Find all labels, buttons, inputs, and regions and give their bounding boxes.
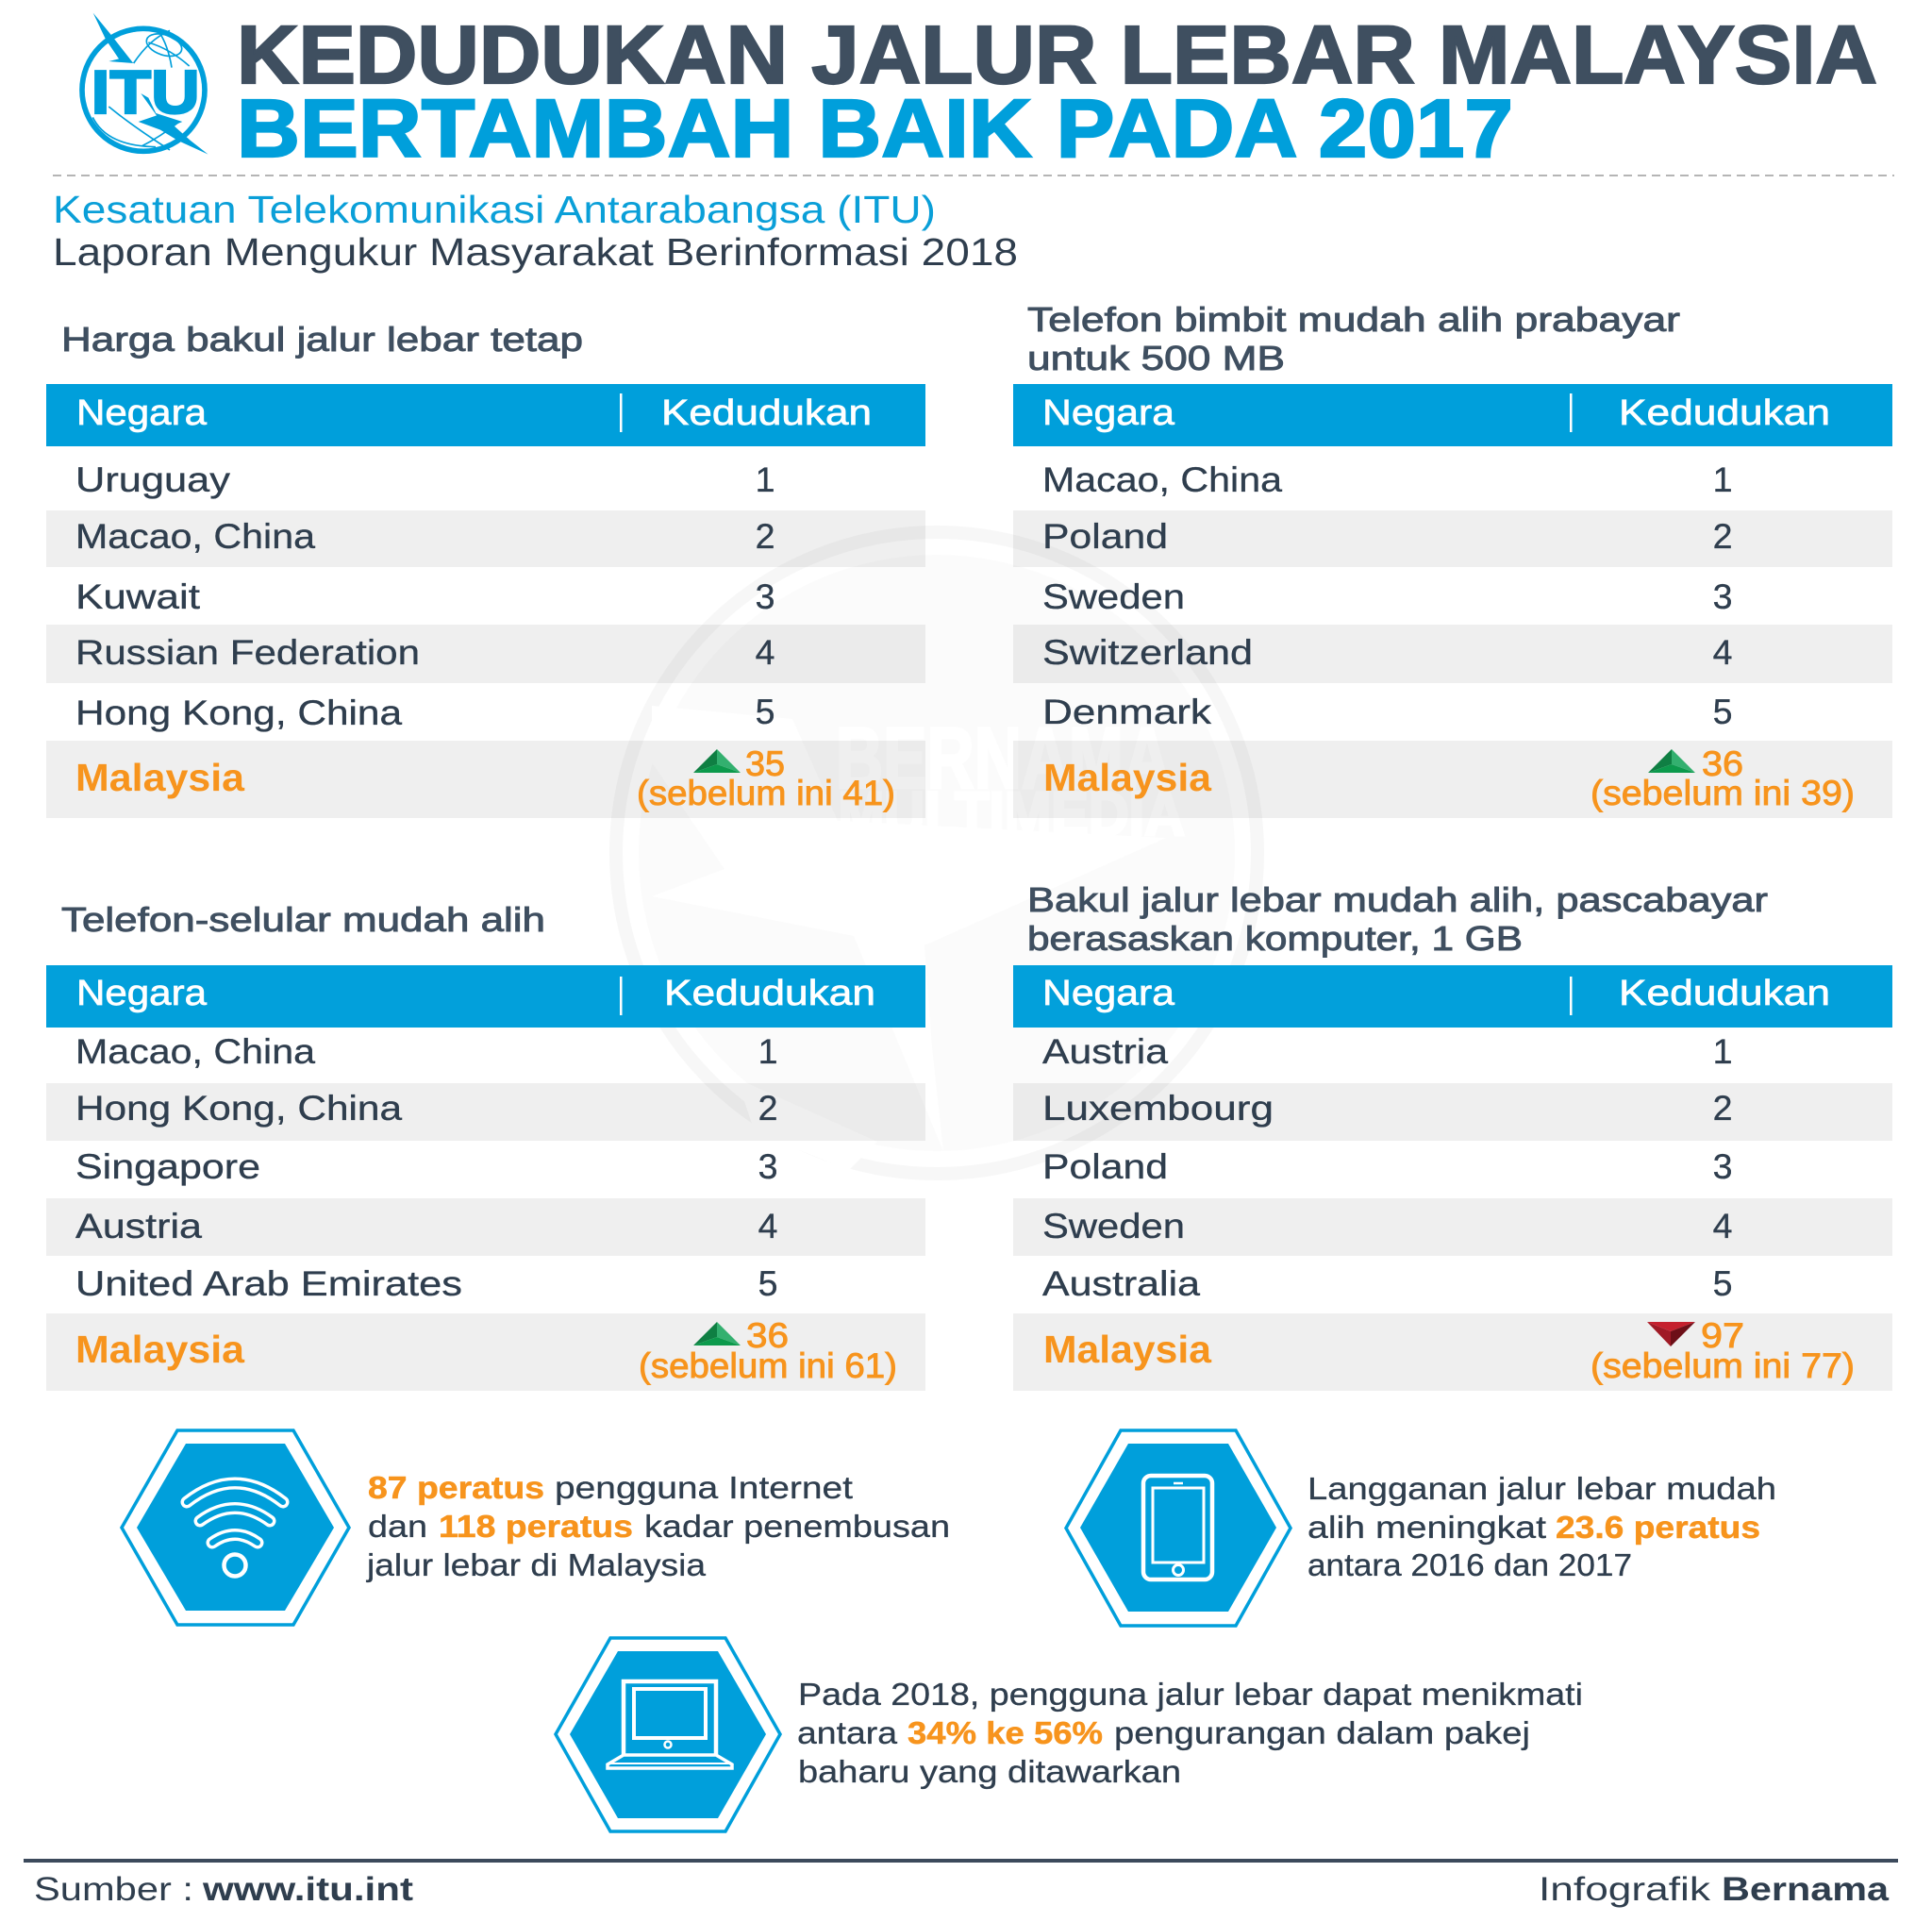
icon: ITU logo: ITU — [92, 58, 200, 126]
table rows: 3 — [1713, 577, 1732, 616]
title — [237, 9, 1877, 175]
footer: credit — [1539, 1871, 1890, 1908]
table rows — [1013, 1031, 1892, 1303]
Malaysia row: 36 — [1702, 744, 1743, 783]
table rows: Poland — [1042, 516, 1168, 556]
Malaysia row: Malaysia — [75, 1328, 245, 1371]
table rows: 3 — [758, 1146, 777, 1186]
table rows: United Arab Emirates — [75, 1263, 462, 1303]
subtitle: Laporan Mengukur Masyarakat Berinformasi 2018 — [53, 230, 1018, 274]
heading — [1027, 300, 1680, 377]
table rows: Sweden — [1042, 1206, 1185, 1245]
panel: Harga bakul jalur lebar tetap — [46, 320, 925, 818]
table rows: Macao, China — [1042, 460, 1282, 499]
table rows: Macao, China — [75, 516, 315, 556]
heading: Bakul jalur lebar mudah alih, pascabayar — [1027, 880, 1768, 919]
text block: internet users: dan — [368, 1509, 427, 1544]
watermark: Bernama Multimedia emblem: MULTIMEDIA — [838, 778, 1185, 848]
icon: up arrow — [693, 749, 741, 773]
text block: mobile broadband subscription: antara 2016 dan 2017 — [1307, 1547, 1632, 1582]
Malaysia row — [46, 1313, 925, 1391]
footer: credit: Infografik — [1539, 1871, 1711, 1908]
table header — [1013, 384, 1892, 446]
watermark: Bernama Multimedia emblem: BERNAMA — [836, 710, 1171, 807]
table rows: Poland — [1042, 1146, 1168, 1186]
table rows: 3 — [756, 577, 774, 616]
heading: berasaskan komputer, 1 GB — [1027, 919, 1523, 958]
Malaysia row: (sebelum ini 41) — [637, 774, 895, 812]
heading: Harga bakul jalur lebar tetap — [61, 320, 583, 359]
table rows: Austria — [75, 1206, 202, 1245]
text block: package reduction: antara — [797, 1715, 898, 1750]
table rows: Singapore — [75, 1146, 260, 1186]
table header — [46, 965, 925, 1028]
icon: up arrow — [1648, 749, 1695, 773]
table rows: 2 — [758, 1088, 777, 1128]
text block: package reduction: pengurangan dalam pakej — [1114, 1715, 1530, 1750]
table rows: Austria — [1042, 1031, 1168, 1071]
Malaysia row: (sebelum ini 77) — [1591, 1346, 1855, 1385]
table rows: 1 — [758, 1031, 777, 1071]
table rows: 2 — [1713, 1088, 1732, 1128]
text block: mobile broadband subscription: 23.6 peratus — [1556, 1510, 1760, 1545]
subtitle: Kesatuan Telekomunikasi Antarabangsa (ITU) — [53, 188, 936, 231]
heading: untuk 500 MB — [1027, 339, 1285, 377]
table header: Negara — [76, 393, 208, 433]
Malaysia row: (sebelum ini 39) — [1591, 774, 1855, 812]
text block: mobile broadband subscription: Langganan jalur lebar mudah — [1307, 1471, 1776, 1506]
icon: ITU logo — [82, 13, 208, 155]
table rows: Uruguay — [75, 460, 230, 499]
text block: internet users: kadar penembusan — [644, 1509, 950, 1544]
table rows: 3 — [1713, 1146, 1732, 1186]
Malaysia row: Malaysia — [1043, 756, 1212, 799]
panel: Telefon-selular mudah alih — [46, 900, 925, 1391]
text block: mobile broadband subscription: alih meningkat — [1307, 1510, 1546, 1545]
table rows: Macao, China — [75, 1031, 315, 1071]
table rows: Australia — [1042, 1263, 1200, 1303]
table rows: 1 — [1713, 1031, 1732, 1071]
table rows: Luxembourg — [1042, 1088, 1274, 1128]
footer: source: Sumber : — [34, 1871, 193, 1908]
icon: down arrow — [1647, 1322, 1695, 1346]
Malaysia row: 35 — [745, 744, 785, 783]
icon: wifi hexagon — [122, 1430, 349, 1625]
Malaysia row: 97 — [1701, 1316, 1744, 1355]
text block: package reduction — [797, 1677, 1583, 1789]
Malaysia row: 36 — [746, 1316, 789, 1355]
text block: package reduction: 34% ke 56% — [908, 1715, 1103, 1750]
text block: internet users — [366, 1470, 950, 1582]
table rows: Hong Kong, China — [75, 1088, 402, 1128]
panel: Telefon bimbit mudah alih prabayar — [1013, 300, 1892, 818]
text block: internet users: 118 peratus — [439, 1509, 633, 1544]
table rows: 4 — [1713, 632, 1732, 672]
table header: Negara — [1042, 393, 1175, 433]
table header: Kedudukan — [1619, 393, 1830, 433]
text block: internet users: jalur lebar di Malaysia — [366, 1547, 707, 1582]
table rows: 2 — [1713, 516, 1732, 556]
table header — [1013, 965, 1892, 1028]
heading — [1027, 880, 1768, 958]
table rows: 4 — [758, 1206, 777, 1245]
table rows: 1 — [1713, 460, 1732, 499]
Malaysia row: (sebelum ini 61) — [639, 1346, 897, 1385]
text block: package reduction: baharu yang ditawarkan — [798, 1754, 1181, 1789]
table rows: Hong Kong, China — [75, 693, 402, 732]
text block: internet users: 87 peratus — [368, 1470, 544, 1505]
table rows: 4 — [756, 632, 774, 672]
table rows: 4 — [1713, 1206, 1732, 1245]
table rows: Switzerland — [1042, 632, 1253, 672]
heading: Telefon-selular mudah alih — [61, 900, 545, 939]
table header: Kedudukan — [661, 393, 872, 433]
footer: source: www.itu.int — [202, 1871, 413, 1908]
table rows: 5 — [1713, 1263, 1732, 1303]
heading: Telefon bimbit mudah alih prabayar — [1027, 300, 1680, 339]
table rows: 1 — [756, 460, 774, 499]
Malaysia row — [1013, 1313, 1892, 1391]
table header: Negara — [1042, 974, 1175, 1013]
table rows: 5 — [756, 692, 774, 731]
subtitle — [53, 188, 1018, 274]
table rows: 5 — [758, 1263, 777, 1303]
table rows — [46, 1031, 925, 1303]
text block: package reduction: Pada 2018, pengguna jalur lebar dapat menikmati — [798, 1677, 1583, 1712]
watermark: Bernama Multimedia emblem — [616, 532, 1257, 1174]
panel: Bakul jalur lebar mudah alih — [1013, 880, 1892, 1391]
Malaysia row — [46, 741, 925, 818]
table rows: 2 — [756, 516, 774, 556]
table rows: Sweden — [1042, 577, 1185, 616]
icon: up arrow — [693, 1322, 741, 1345]
table rows: 5 — [1713, 692, 1732, 731]
footer: credit: Bernama — [1722, 1871, 1890, 1908]
table rows: Kuwait — [75, 577, 201, 616]
title: KEDUDUKAN JALUR LEBAR MALAYSIA — [237, 9, 1877, 101]
footer: source — [34, 1871, 413, 1908]
table header: Negara — [76, 974, 208, 1013]
Malaysia row: Malaysia — [75, 756, 245, 799]
title: BERTAMBAH BAIK PADA 2017 — [237, 83, 1513, 175]
icon: laptop hexagon — [556, 1638, 780, 1831]
text block: mobile broadband subscription — [1307, 1471, 1776, 1582]
table header: Kedudukan — [664, 974, 875, 1013]
text block: internet users: pengguna Internet — [555, 1470, 853, 1505]
Malaysia row: Malaysia — [1043, 1328, 1212, 1371]
table rows — [1013, 460, 1892, 731]
table rows: Russian Federation — [75, 632, 420, 672]
Malaysia row — [1013, 741, 1892, 818]
table header: Kedudukan — [1619, 974, 1830, 1013]
table rows — [46, 460, 925, 732]
icon: smartphone hexagon — [1066, 1430, 1291, 1626]
table rows: Denmark — [1042, 692, 1211, 731]
table header — [46, 384, 925, 446]
